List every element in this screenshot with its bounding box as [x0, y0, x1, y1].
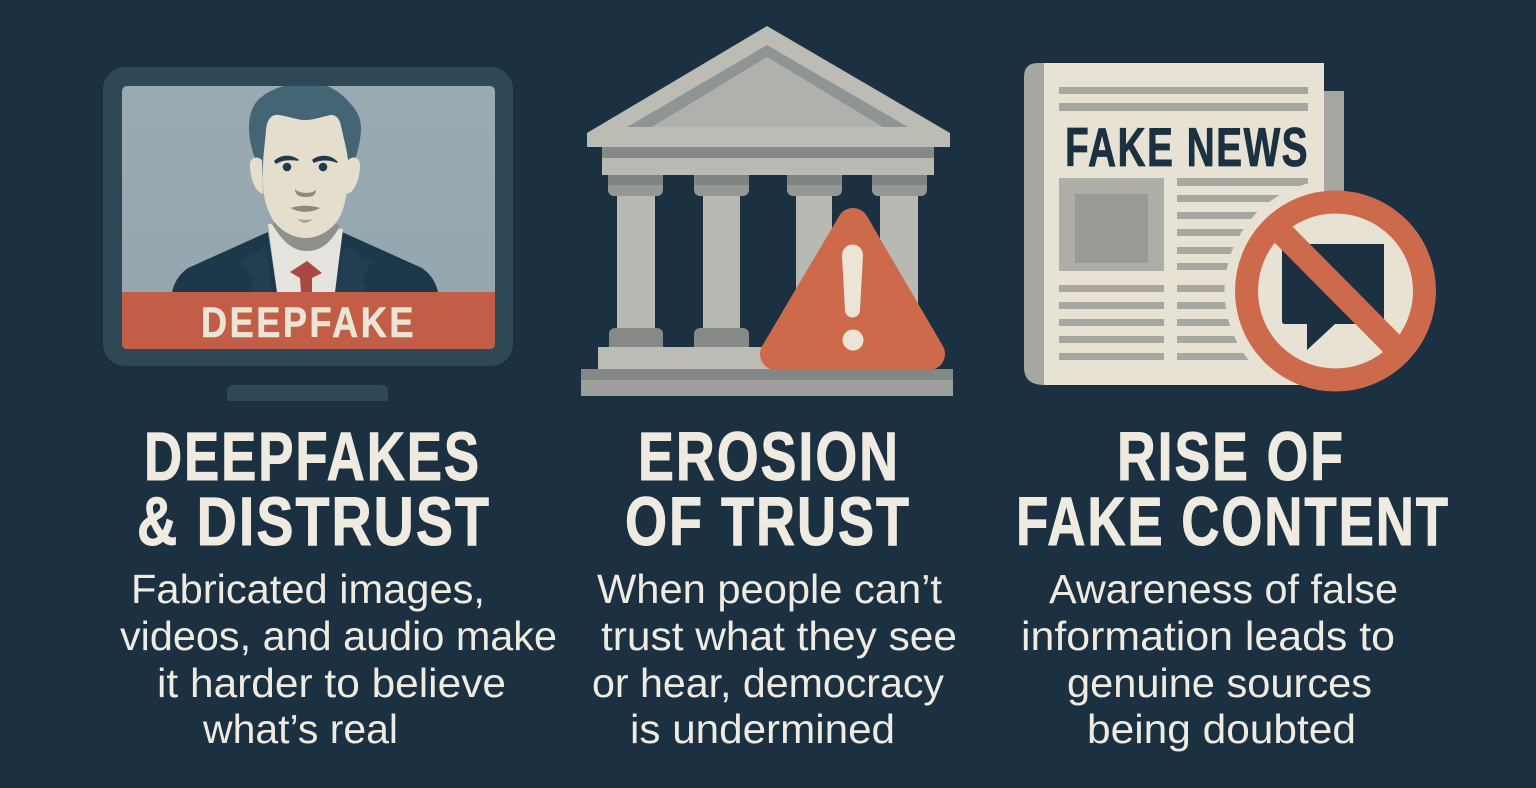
text block: fake content description: being doubted [1087, 706, 1356, 752]
heading: erosion of trust: OF TRUST [625, 483, 911, 560]
panel: deepfakes [103, 67, 557, 752]
text block: fake content description: information leads to [1021, 613, 1395, 659]
banner label: DEEPFAKE: DEEPFAKE [201, 299, 416, 347]
icon: government building with warning triangle [581, 26, 953, 396]
text block: deepfakes description: it harder to believe [157, 660, 506, 706]
heading: deepfakes and distrust [137, 418, 491, 560]
panel: rise of fake content [1016, 63, 1450, 752]
text block: deepfakes description: videos, and audio make [120, 613, 557, 659]
heading: rise of fake content [1016, 418, 1450, 560]
text block: deepfakes description: Fabricated images, [131, 566, 485, 612]
text block: deepfakes description [120, 566, 557, 752]
text block: erosion description: or hear, democracy [592, 660, 944, 706]
icon: prohibition sign over speech bubble [1246, 202, 1424, 380]
heading: erosion of trust: EROSION [638, 418, 900, 495]
newspaper headline: FAKE NEWS: FAKE NEWS [1065, 116, 1309, 178]
text block: fake content description: Awareness of false [1049, 566, 1398, 612]
text block: deepfakes description: what’s real [202, 706, 398, 752]
icon: television showing deepfake presenter [103, 67, 513, 401]
text block: erosion description [592, 566, 957, 752]
heading: deepfakes and distrust: DEEPFAKES [144, 418, 481, 495]
heading: erosion of trust [625, 418, 911, 560]
text block: erosion description: is undermined [630, 706, 895, 752]
icon: fake news newspaper with prohibition sign [1024, 63, 1446, 402]
text block: fake content description [1021, 566, 1398, 752]
heading: rise of fake content: RISE OF [1117, 418, 1345, 495]
heading: deepfakes and distrust: & DISTRUST [137, 483, 491, 560]
text block: fake content description: genuine sources [1067, 660, 1372, 706]
icon: warning triangle [776, 224, 929, 354]
panel: erosion of trust [581, 26, 957, 752]
text block: erosion description: When people can’t [597, 566, 943, 612]
text block: erosion description: trust what they see [601, 613, 957, 659]
